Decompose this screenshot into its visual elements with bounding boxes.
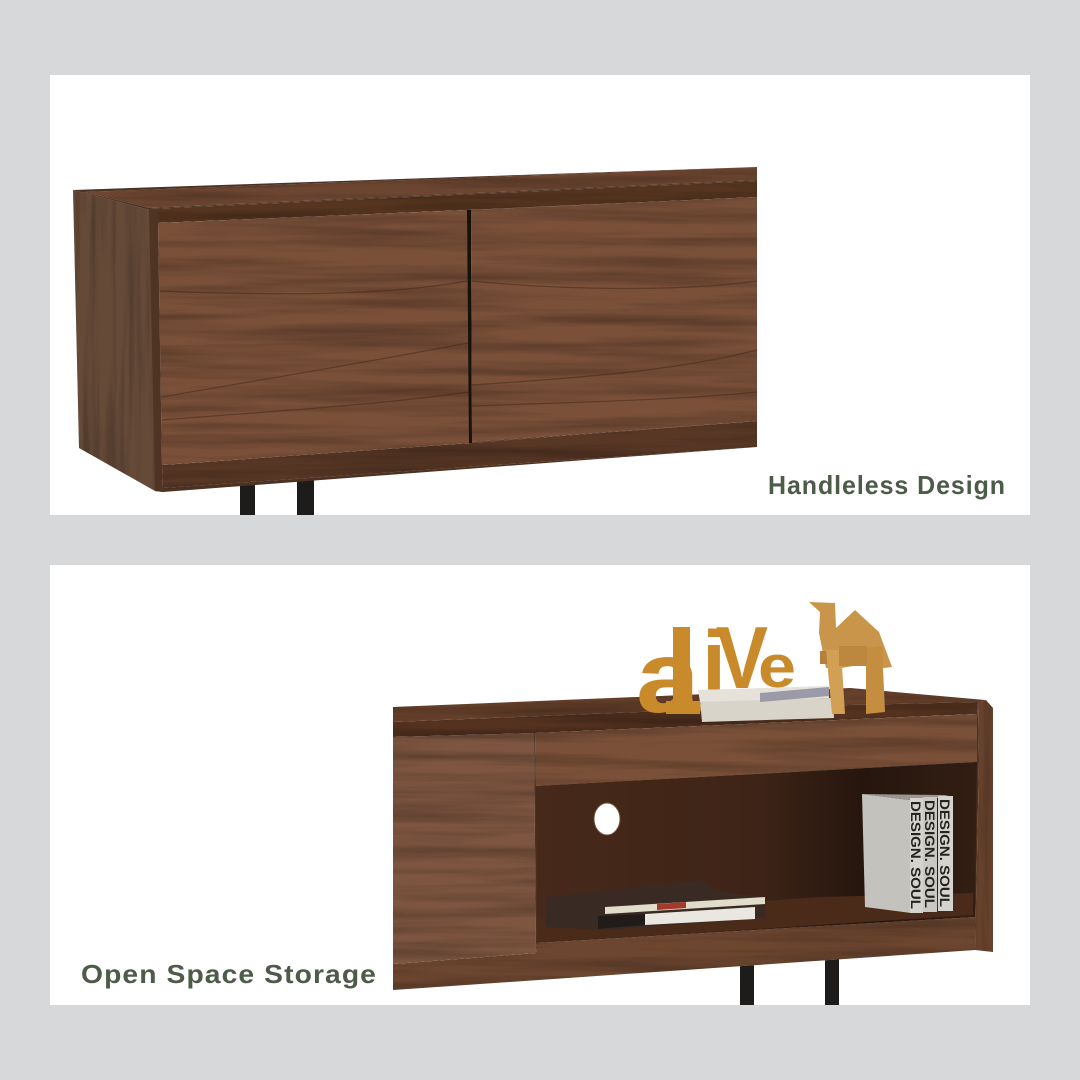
stacked books on top [698, 686, 834, 722]
decorative word: alive [636, 608, 796, 734]
lower front rail [393, 917, 975, 990]
right door [471, 197, 757, 442]
top shelf surface [393, 702, 978, 737]
cabinet silhouette [393, 688, 993, 990]
front edge of side panel [149, 209, 163, 492]
heading: handleless design: Handleless Design [768, 470, 1006, 500]
decorative word: alive: e [758, 633, 796, 700]
wooden camel figure [809, 602, 892, 714]
cabinet silhouette [73, 167, 757, 492]
decorative word: alive: a [636, 620, 701, 734]
metal legs [240, 480, 314, 515]
open compartment interior [536, 762, 977, 943]
compartment shelf [537, 893, 973, 943]
heading: open space storage: Open Space Storage [81, 959, 377, 989]
rear rim [393, 688, 985, 737]
decorative word: alive: i [702, 614, 726, 708]
cabinet top surface [84, 167, 757, 208]
grey boxed books: DESIGN. SOUL [908, 801, 924, 909]
grey boxed books: DESIGN. SOUL [922, 800, 938, 908]
cable hole [594, 803, 620, 835]
grey boxed books [862, 794, 953, 913]
panel: open space storage [50, 565, 1030, 1005]
upper front rail [150, 181, 757, 223]
door gap [467, 210, 472, 443]
left door [393, 733, 536, 964]
magazines on shelf [546, 880, 765, 930]
decorative word: alive: V [716, 608, 768, 707]
panel: handleless design [50, 75, 1030, 515]
left door [158, 210, 470, 465]
grey boxed books: DESIGN. SOUL [937, 799, 953, 907]
lower rail [162, 421, 757, 488]
upper drawer front [535, 714, 977, 786]
right end panel [975, 700, 993, 952]
closed cabinet [73, 167, 757, 492]
open cabinet [393, 688, 993, 990]
cabinet side panel [73, 190, 163, 492]
metal legs [740, 958, 839, 1005]
